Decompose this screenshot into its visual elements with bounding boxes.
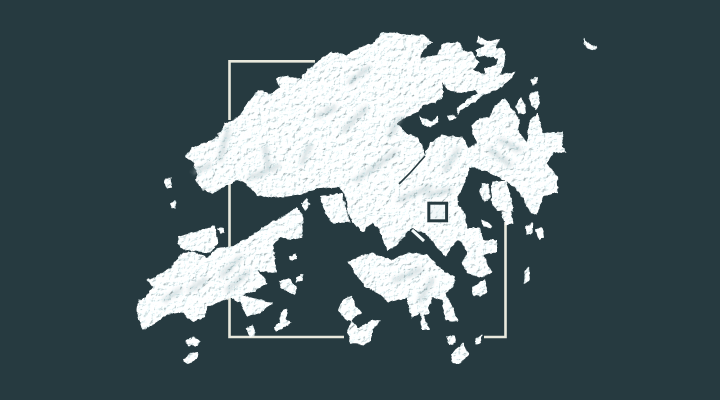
land: outlying islands xyxy=(164,36,597,364)
channel: runway xyxy=(412,230,424,241)
land: New Territories and Kowloon xyxy=(185,32,568,277)
inset marker: small square xyxy=(429,203,447,221)
land: Lantau Island xyxy=(137,207,303,330)
channel: Shing Mun river xyxy=(399,156,425,184)
land: airport island xyxy=(177,226,218,253)
land: Hong Kong Island xyxy=(348,252,458,330)
land: Lamma Island xyxy=(338,296,381,345)
hillshade: ridge shadows xyxy=(165,68,520,300)
frame: square outline behind the map xyxy=(230,61,506,337)
map: Hong Kong landmass xyxy=(137,32,597,364)
land: container terminal xyxy=(320,193,350,224)
